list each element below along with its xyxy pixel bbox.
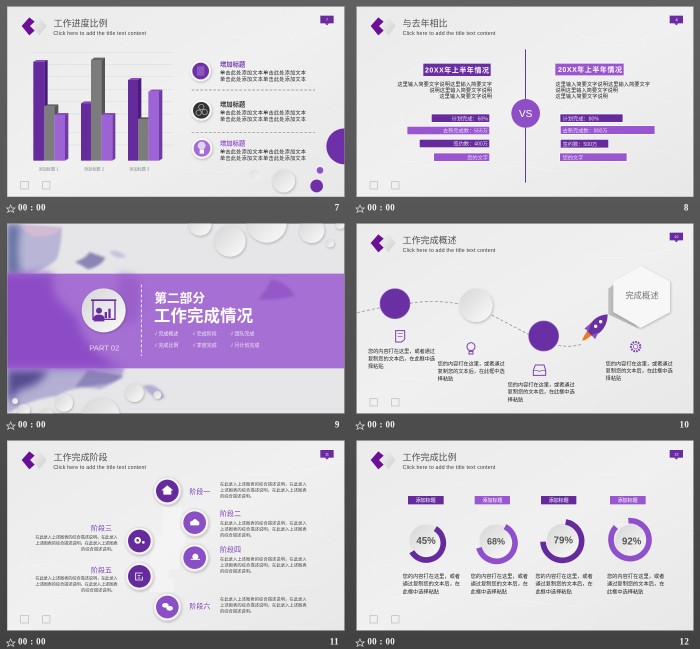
stage 4 [181,544,307,575]
left column: 签约数：400万 [453,140,488,148]
step 2: 您的内容打在这里，或者通过 [438,360,505,368]
slide 12 header: 12 [674,452,678,456]
list item 1 [190,60,306,83]
faint connector blocks [148,507,187,592]
slide 11 header: 11 [325,452,329,456]
ring 68%: 您的内容打在这里，或者 [471,572,528,580]
slide 11 background [7,441,344,630]
section items: √ 完成比例 [154,342,178,349]
left column: 您的文字 [467,153,488,161]
stage 6: 上述图表的综合描述说明，在此录入上述图表 [220,601,307,608]
left column: 20XX年上半年情况 [425,65,489,74]
step 1 [368,331,435,370]
ring 92%: 您的内容打在这里，或者 [607,572,664,580]
ring 68%: 68% [487,537,505,547]
stage 5: 上述图表的综合描述说明，在此录入上述图表 [35,580,118,587]
footer 8: 8 [684,202,689,212]
ring 45% [403,496,460,595]
slide 8 header: 8 [676,18,678,22]
right column: 您的文字 [563,153,583,161]
left column: 这里输入简要文字说明这里输入简要文字 [397,80,492,88]
stage 1: 的综合描述说明。 [220,492,254,499]
center divider and VS: VS [519,109,533,120]
stage 6: 的综合描述说明。 [220,607,254,614]
footer 7 [7,202,340,212]
dashed route [357,301,582,346]
stage 1: 上述图表的综合描述说明，在此录入上述图表 [220,486,307,493]
step 3: 择粘贴 [508,395,523,403]
footer 10 [356,419,689,429]
white paper circles [12,224,344,414]
footer 9: 00 : 00 [18,419,46,429]
stage 2: 的综合描述说明。 [220,531,254,538]
bar chart: 添加标题 2 [84,165,105,171]
step 2: 复制您的文本后，在此框中选 [438,367,505,375]
section items [154,330,259,349]
slide 8 header: Click here to add the title text content [403,31,496,37]
footer 12: 00 : 00 [367,636,395,646]
presentation icon circle [82,288,126,332]
purple band [0,274,344,368]
part label: PART 02 [89,343,119,352]
stage 5: 在此录入上述图表的综合描述说明，在此录入 [35,575,118,582]
step 2 [438,343,505,383]
slide 7 header: 7 [326,18,328,22]
section items: √ 季度完成 [193,342,217,349]
group 2 bars [81,58,115,161]
stage 2: 阶段二 [220,509,241,518]
ring 79% [535,496,593,595]
stage 3: 的综合描述说明。 [81,545,115,552]
section items: √ 团队完成 [230,330,254,337]
list item 3 [192,138,306,162]
stage 4: 的综合描述说明。 [220,568,254,575]
panel: slide 9 section cover [6,223,345,430]
hexagon label [608,266,670,329]
ring 79%: 79% [554,535,573,546]
right column: 去新完成数：800万 [563,126,608,134]
slide 10 header: 10 [674,235,678,239]
stage 2 [181,509,307,538]
right column [555,64,655,161]
step 4: 您的内容打在这里，或者通过 [606,359,673,367]
ring 45%: 此框中选择粘贴 [403,587,439,595]
section title: 工作完成情况 [154,307,253,326]
list item 2: 单击此处添加文本单击此处添加文本 [220,115,306,123]
footer 12 [356,636,689,646]
stage 4: 阶段四 [220,545,241,554]
left column: 说明这里输入简要文字说明 [429,86,492,94]
section title [154,291,253,326]
list item 1: 单击此处添加文本单击此处添加文本 [220,75,306,83]
right column: 20XX年上半年情况 [558,65,622,74]
ring 45%: 通过复制您的文本后，在 [403,579,460,587]
step 3 [508,365,575,403]
step 4 [606,342,673,382]
section items: √ 完成概述 [154,330,178,337]
ring 68%: 通过复制您的文本后，在 [471,579,528,587]
ring 92%: 通过复制您的文本后，在 [607,579,664,587]
milestone circles [380,289,559,351]
slide 8 header [370,16,683,189]
ring 79%: 此框中选择粘贴 [535,587,572,595]
footer 11: 11 [330,636,339,646]
bar chart [32,52,173,171]
step 2: 择粘贴 [438,375,453,383]
section title: 第二部分 [154,291,205,306]
list item 3: 增加标题 [220,138,246,147]
stage 1: 阶段一 [189,487,210,496]
stage 3: 在此录入上述图表的综合描述说明，在此录入 [35,533,118,540]
ring 92%: 添加标题 [618,497,638,504]
watercolor petals [7,224,165,413]
slide 10 header: 工作完成概述 [403,234,457,245]
stage 3: 阶段三 [91,523,112,532]
right column: 签约数：500万 [563,140,597,148]
step 3: 复制您的文本后，在此框中选 [508,388,575,396]
section items: √ 月计划完成 [230,342,259,349]
footer 10: 00 : 00 [367,419,395,429]
stage 4: 上述图表的综合描述说明，在此录入上述图表 [220,562,307,569]
right column: 计划完成：80% [563,114,599,122]
slide 12 header: Click here to add the title text content [403,465,496,471]
left column: 去新完成数：555万 [443,127,488,135]
right column: 说明这里输入简要文字说明 [555,86,618,94]
group 3 bars [128,78,162,161]
slide 7 header: 工作进度比例 [54,17,108,28]
slide 8 background [357,7,693,197]
left column: 计划完成：60% [452,114,488,122]
footer 10: 10 [680,419,689,429]
ring 68%: 添加标题 [482,497,502,504]
slide 11 header [21,450,334,623]
list item 3: 单击此处添加文本单击此处添加文本 [220,154,306,162]
right column: 这里输入简要文字说明这里输入简要文字 [555,80,650,88]
footer 9: 9 [335,419,340,429]
stage 1: 在此录入上述图表的综合描述说明，在此录入 [220,481,307,488]
slide 11 header: Click here to add the title text content [53,465,147,471]
footer 8: 00 : 00 [367,202,395,212]
stage 3 [35,523,153,555]
slide 12 header [370,450,683,623]
slide 8 header: 与去年相比 [403,17,448,28]
step 1: 复制您的文本后，在此框中选 [368,354,435,362]
list item 1: 单击此处添加文本单击此处添加文本 [220,68,306,76]
slide 7 header [21,16,334,189]
list item 2: 单击此处添加文本单击此处添加文本 [220,108,306,116]
left column: 这里输入简要文字说明 [439,92,492,100]
stage 6: 阶段六 [189,602,210,611]
slide 7 background [7,7,344,197]
step 1: 择粘贴 [368,362,384,370]
slide 11 header: 工作完成阶段 [54,451,108,462]
ring 68%: 此框中选择粘贴 [471,587,507,595]
ring 79%: 添加标题 [549,497,569,504]
step 4: 复制您的文本后，在此框中选 [606,367,673,375]
stage 3: 上述图表的综合描述说明，在此录入上述图表 [35,539,118,546]
panel: slide 12 ratios [356,441,693,646]
stage 4: 在此录入上述图表的综合描述说明，在此录入 [220,556,307,563]
panel: slide 8 comparison [356,7,693,212]
footer 8 [356,202,689,212]
stage 6 [154,593,307,621]
section items: √ 完成阶段 [193,330,217,337]
footer 7: 7 [335,202,340,212]
footer 11 [7,636,339,646]
stage 6: 在此录入上述图表的综合描述说明，在此录入 [220,595,307,602]
icon: rocket [582,314,608,341]
list item 2: 增加标题 [220,99,246,108]
ring 79%: 通过复制您的文本后，在 [535,579,593,587]
bar chart: 添加标题 1 [39,165,59,171]
footer 12: 12 [680,636,689,646]
ring 68% [471,496,528,595]
list item 1: 增加标题 [220,60,246,69]
left column [397,64,492,161]
stage 2: 上述图表的综合描述说明，在此录入上述图表 [220,525,307,532]
stage 2: 在此录入上述图表的综合描述说明，在此录入 [220,519,307,526]
step 3: 您的内容打在这里，或者通过 [508,380,575,388]
ring 45%: 添加标题 [416,497,436,504]
slide 10 header [370,233,683,406]
footer 9 [7,419,340,429]
slide 12 background [357,441,693,630]
panel: slide 7 progress [7,7,344,212]
list item 2 [191,99,306,123]
ring 92%: 此框中选择粘贴 [607,587,643,595]
ring 92% [607,496,664,595]
hexagon label: 完成概述 [625,291,659,301]
slide 12 header: 工作完成比例 [403,451,457,462]
footer 11: 00 : 00 [18,636,46,646]
step 1: 您的内容打在这里，或者通过 [368,347,435,355]
step 4: 择粘贴 [606,374,621,382]
slide 10 header: Click here to add the title text content [403,248,496,254]
stage 5: 的综合描述说明。 [81,586,115,593]
panel: slide 11 stages [7,441,344,646]
footer 7: 00 : 00 [18,202,46,212]
slide 7 header: Click here to add the title text content [53,31,147,37]
stage 1 [154,477,307,505]
decorative circles [249,128,344,192]
center divider and VS [511,49,540,183]
ring 45%: 您的内容打在这里，或者 [403,572,460,580]
panel: slide 10 overview [356,224,693,429]
slide 9 background [7,224,344,413]
group 1 bars [33,60,68,161]
ring 45%: 45% [416,536,436,547]
slide 10 background [357,224,693,413]
stage 5 [35,563,153,593]
list item 3: 单击此处添加文本单击此处添加文本 [220,147,306,155]
bar chart: 添加标题 3 [129,165,150,171]
ring 92%: 92% [622,537,642,548]
right column: 这里输入简要文字说明 [555,92,608,100]
ring 79%: 您的内容打在这里，或者 [535,572,593,580]
stage 5: 阶段五 [91,566,112,575]
